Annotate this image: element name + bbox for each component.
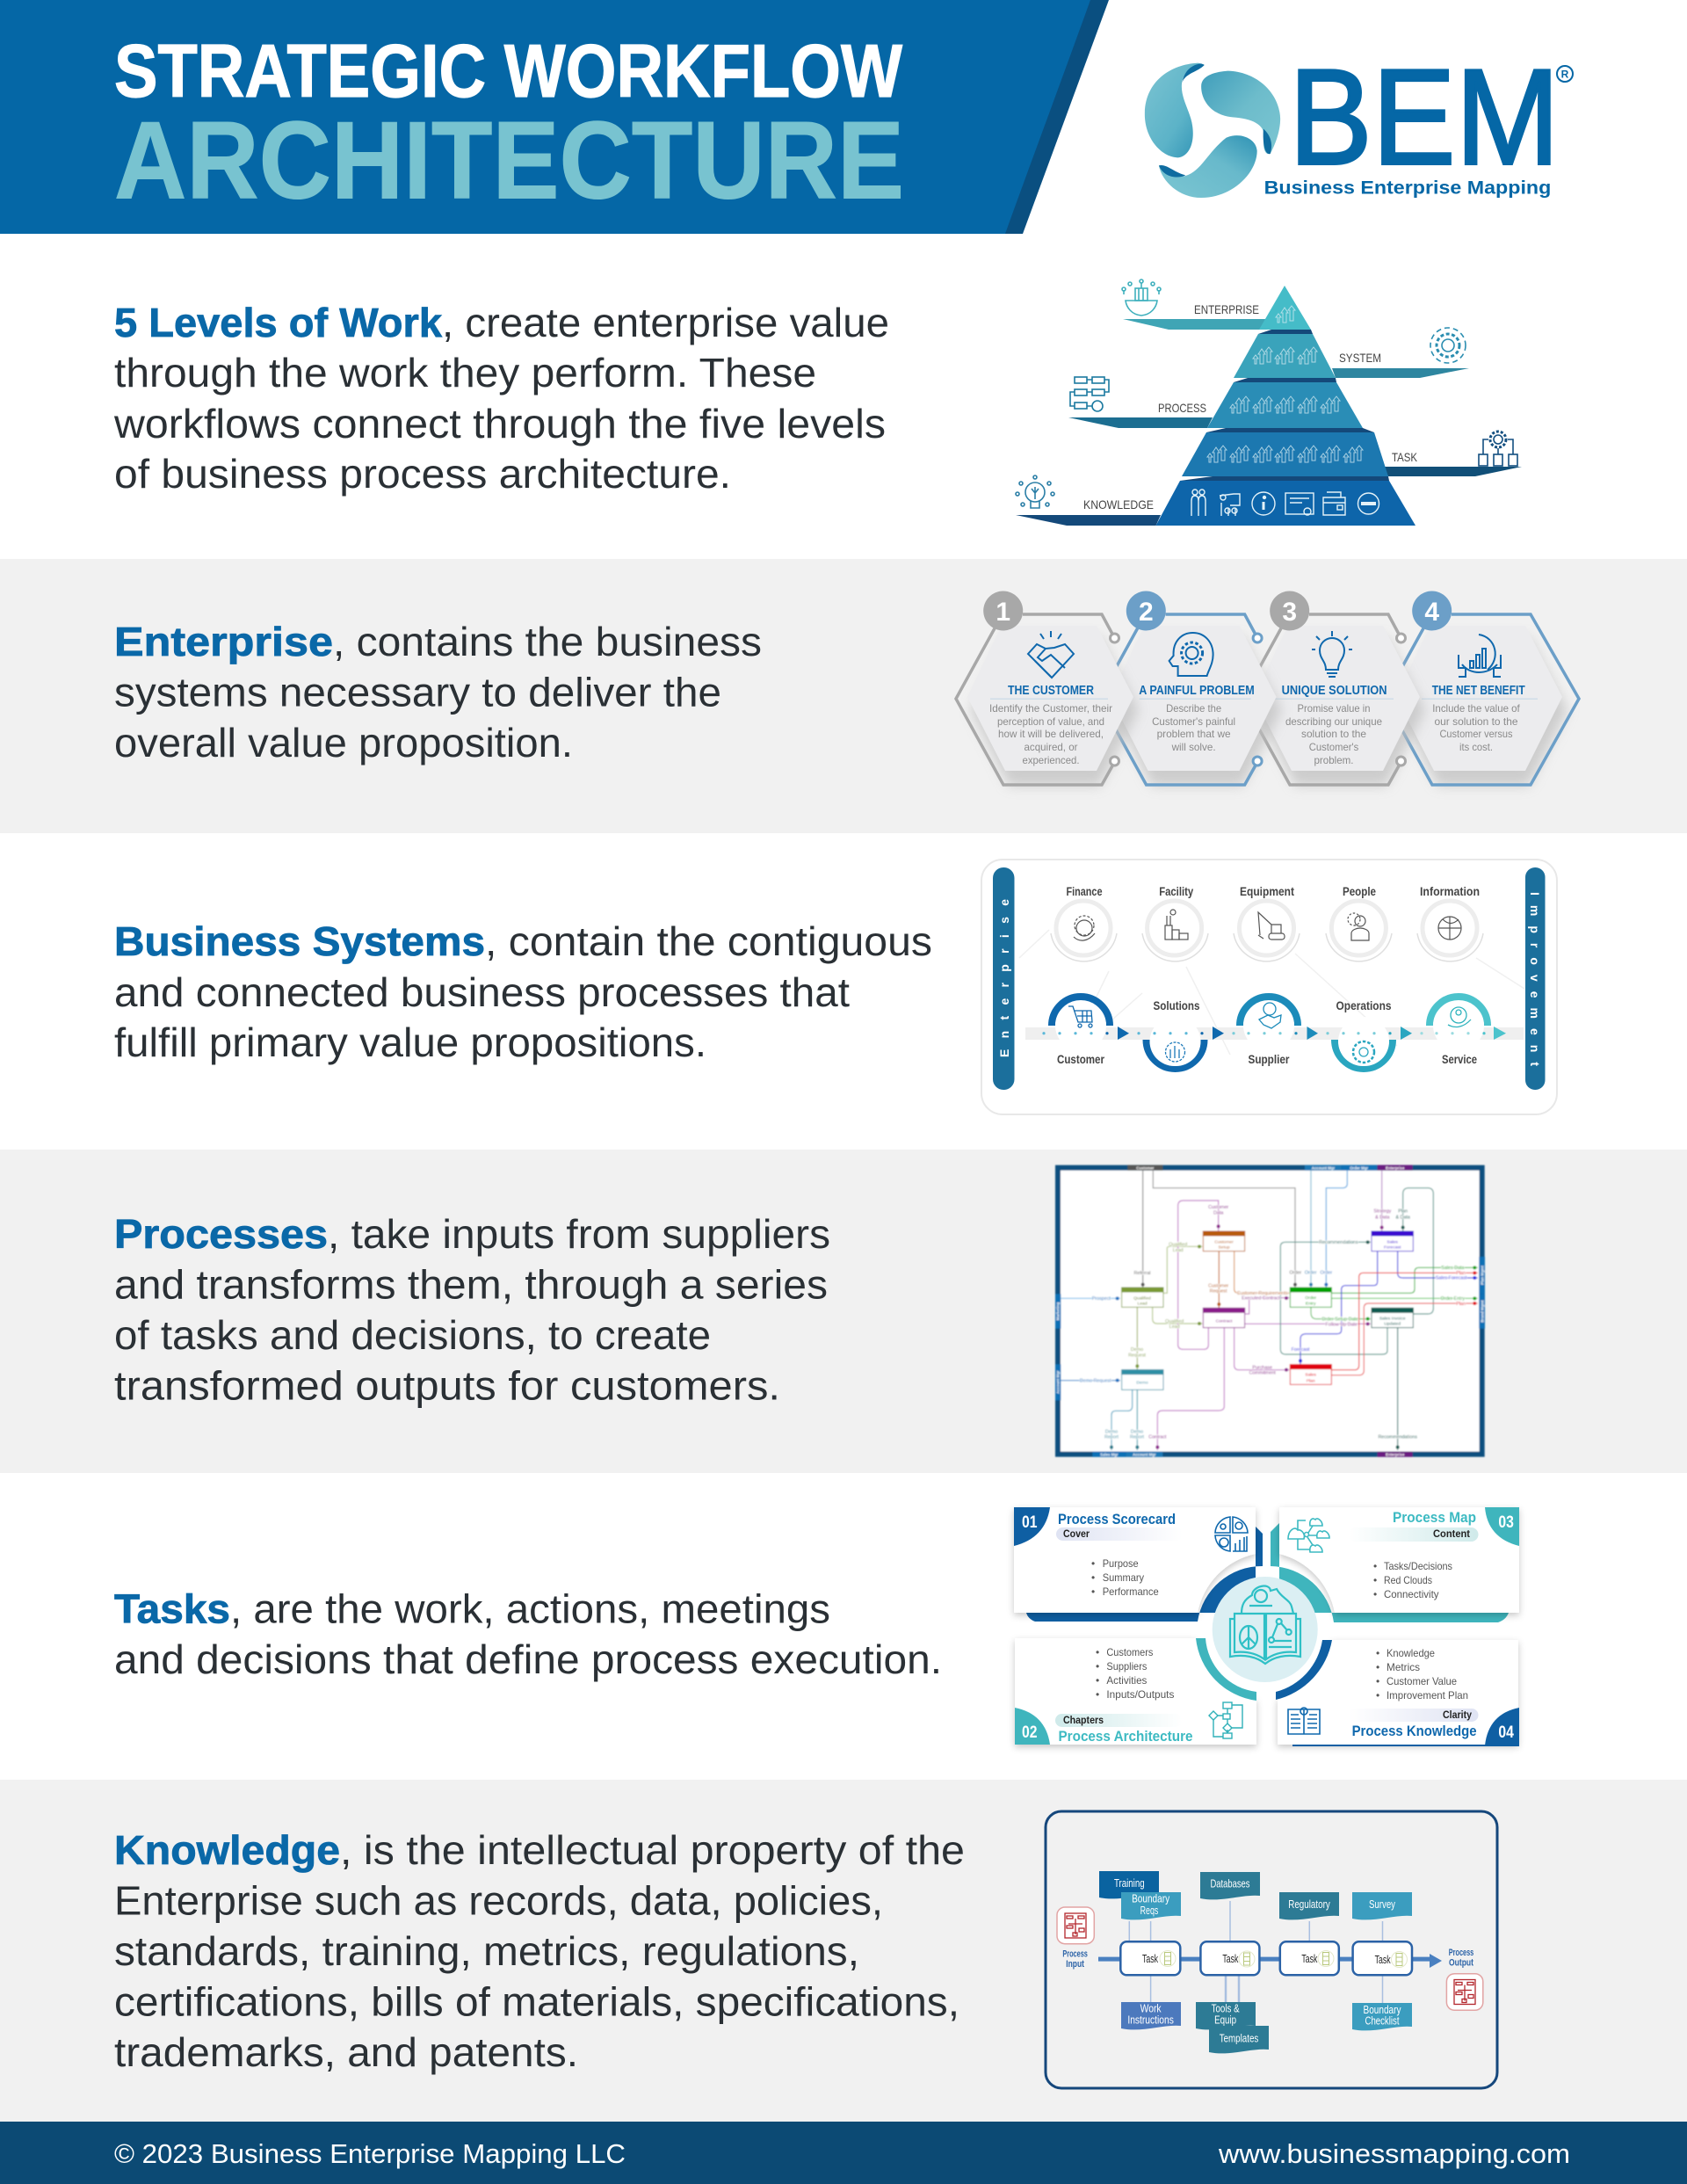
pyramid labels: TASK bbox=[1392, 450, 1418, 464]
grey band: processes bbox=[0, 1150, 1687, 1473]
text block: 5 levels of work: , create enterprise value bbox=[442, 300, 889, 345]
card 01: process scorecard: Process Scorecard bbox=[1058, 1511, 1176, 1527]
map frame bbox=[1058, 1168, 1482, 1455]
card 02: process architecture bbox=[1015, 1638, 1256, 1745]
text block: enterprise: systems necessary to deliver the bbox=[114, 670, 721, 715]
text block: 5 levels of work: of business process architecture. bbox=[114, 451, 731, 497]
enterprise side bar bbox=[993, 867, 1014, 1090]
title: ARCHITECTURE bbox=[114, 100, 904, 221]
card 04: process knowledge: Customer Value bbox=[1387, 1675, 1457, 1687]
document labels: Boundary bbox=[1132, 1891, 1169, 1905]
text block: processes: of tasks and decisions, to create bbox=[114, 1312, 711, 1358]
process box labels: Order bbox=[1305, 1295, 1316, 1301]
process box labels: Sales bbox=[1305, 1373, 1316, 1378]
copyright: © 2023 Business Enterprise Mapping LLC bbox=[114, 2138, 626, 2169]
flow arrowheads bbox=[1110, 1224, 1476, 1449]
text block: knowledge bbox=[114, 1827, 965, 2075]
step 2: a painful problem: A PAINFUL PROBLEM bbox=[1139, 684, 1255, 698]
step 4: the net benefit: its cost. bbox=[1459, 741, 1493, 753]
swimlane tabs bbox=[1055, 1165, 1485, 1457]
flow labels: Qualified bbox=[1165, 1319, 1184, 1324]
process box labels: Entry bbox=[1306, 1302, 1316, 1307]
logo swirl mark bbox=[1145, 63, 1280, 198]
process output bbox=[1446, 1948, 1483, 2010]
card 02: process architecture: 02 bbox=[1022, 1723, 1037, 1742]
step 2: a painful problem: Describe the bbox=[1166, 702, 1221, 715]
value chain labels: Service bbox=[1442, 1053, 1477, 1066]
text block: 5 levels of work: workflows connect through the five levels bbox=[113, 401, 886, 446]
process box labels: Customer bbox=[1214, 1239, 1234, 1244]
card 04: process knowledge: • bbox=[1376, 1675, 1379, 1687]
process input bbox=[1057, 1907, 1094, 1970]
footer bar bbox=[0, 2122, 1687, 2184]
document labels: Equip bbox=[1214, 2013, 1236, 2027]
document labels: Instructions bbox=[1127, 2013, 1174, 2027]
card 02: process architecture: • bbox=[1096, 1660, 1099, 1672]
chain dots bbox=[1042, 1032, 1486, 1034]
text block: knowledge: standards, training, metrics, regulations, bbox=[114, 1928, 859, 1974]
support labels: Finance bbox=[1067, 885, 1103, 898]
pyramid labels bbox=[1083, 302, 1418, 512]
process box labels: Setup bbox=[1218, 1244, 1230, 1250]
swimlane tabs: Enterprise bbox=[1386, 1165, 1405, 1170]
value chain labels: Solutions bbox=[1153, 999, 1200, 1012]
document labels: Regulatory bbox=[1288, 1897, 1330, 1911]
document labels: Boundary bbox=[1364, 2003, 1401, 2016]
process box labels: Updated bbox=[1384, 1322, 1401, 1327]
step 3: unique solution: 3 bbox=[1282, 598, 1297, 627]
card 01: process scorecard: Performance bbox=[1103, 1585, 1159, 1598]
task boxes: Task bbox=[1142, 1952, 1158, 1965]
step 1: the customer: perception of value, and bbox=[997, 715, 1104, 728]
process box labels bbox=[1133, 1239, 1406, 1386]
registered mark bbox=[1557, 66, 1573, 82]
flow labels: Commitment bbox=[1249, 1371, 1276, 1376]
task scorecard diagram bbox=[1014, 1507, 1519, 1746]
flow labels: Purchase bbox=[1252, 1366, 1272, 1371]
step 1: the customer: experienced. bbox=[1023, 754, 1079, 766]
ring segment: teal top right bbox=[1271, 1523, 1509, 1622]
flow labels: Report bbox=[1104, 1435, 1119, 1440]
document labels: Work bbox=[1140, 2002, 1162, 2014]
process box labels: Plan bbox=[1307, 1378, 1315, 1383]
central book hub bbox=[1213, 1577, 1318, 1682]
card 03: process map: Connectivity bbox=[1384, 1588, 1439, 1600]
flow labels: Plan bbox=[1456, 1302, 1466, 1307]
icon: knowledge bulb bbox=[1016, 475, 1054, 508]
icons: cart, solutions, handshake, gear, service bbox=[1068, 1003, 1471, 1063]
process box labels: Contract bbox=[1216, 1319, 1233, 1324]
text block: processes: Processes bbox=[114, 1211, 328, 1257]
flow labels: Recommendations bbox=[1378, 1434, 1417, 1440]
knowledge documents bbox=[1099, 1871, 1412, 2053]
step 4: the net benefit: Customer versus bbox=[1439, 728, 1513, 740]
flow labels: Plan bbox=[1456, 1271, 1466, 1276]
support labels: Facility bbox=[1159, 885, 1194, 898]
swimlane tabs: Sales Mgr bbox=[1100, 1452, 1119, 1456]
step 3: unique solution: problem. bbox=[1314, 754, 1353, 766]
document labels: Training bbox=[1114, 1876, 1145, 1890]
hexagon steps diagram bbox=[956, 591, 1579, 786]
flow labels: Data bbox=[1213, 1210, 1223, 1215]
step 1: the customer: how it will be delivered, bbox=[998, 728, 1104, 740]
flow labels: Demo bbox=[1105, 1430, 1118, 1435]
card 02: process architecture: Inputs/Outputs bbox=[1106, 1688, 1174, 1701]
card 04: process knowledge: Clarity bbox=[1443, 1709, 1472, 1721]
process box labels: Forecast bbox=[1384, 1244, 1401, 1250]
logo wordmark: BEM bbox=[1289, 40, 1560, 193]
step 3: unique solution: solution to the bbox=[1301, 728, 1366, 740]
card 04: process knowledge: Metrics bbox=[1387, 1661, 1420, 1673]
process output: Process bbox=[1449, 1948, 1473, 1958]
flow labels: Lead bbox=[1169, 1324, 1180, 1330]
card 04: process knowledge: • bbox=[1376, 1661, 1379, 1673]
flow labels: Contract bbox=[1148, 1434, 1167, 1440]
text block: knowledge: Enterprise such as records, data, policies, bbox=[114, 1877, 883, 1923]
flow lines bbox=[1061, 1171, 1478, 1450]
step 3: unique solution bbox=[1242, 591, 1425, 786]
text block: processes: transformed outputs for customers. bbox=[114, 1362, 780, 1408]
flow labels: Recommendations bbox=[1319, 1240, 1358, 1245]
text block: tasks: and decisions that define process execution. bbox=[114, 1636, 942, 1682]
card 02: process architecture: • bbox=[1096, 1688, 1099, 1701]
text block: tasks: , are the work, actions, meetings bbox=[230, 1585, 830, 1631]
card 02: process architecture: Customers bbox=[1106, 1646, 1153, 1658]
flow labels: Referral bbox=[1134, 1271, 1150, 1276]
text block: 5 levels of work: 5 Levels of Work bbox=[114, 300, 442, 345]
knowledge level icons bbox=[1191, 490, 1379, 516]
card 03: process map: • bbox=[1373, 1574, 1377, 1586]
value chain labels: Supplier bbox=[1248, 1053, 1290, 1066]
card 01: process scorecard: • bbox=[1091, 1571, 1095, 1584]
icon: system gear bbox=[1430, 328, 1466, 363]
document labels bbox=[1114, 1876, 1401, 2044]
card 03: process map: Process Map bbox=[1393, 1509, 1476, 1526]
step 3: unique solution: Promise value in bbox=[1297, 702, 1371, 715]
process output: Output bbox=[1449, 1958, 1473, 1969]
document labels: Templates bbox=[1220, 2032, 1259, 2044]
process box labels: Qualified bbox=[1133, 1295, 1151, 1301]
task boxes: Task bbox=[1375, 1953, 1391, 1966]
card 01: process scorecard bbox=[1014, 1507, 1256, 1613]
text block: 5 levels of work: through the work they perform. These bbox=[114, 350, 816, 395]
text block: business systems: , contain the contiguous bbox=[485, 918, 932, 964]
flow labels: Demo bbox=[1131, 1430, 1143, 1435]
card 02: process architecture: Activities bbox=[1106, 1674, 1147, 1687]
pyramid connector gaps bbox=[1180, 330, 1389, 481]
flow labels: Customer bbox=[1208, 1205, 1228, 1210]
logo: BEM Business Enterprise Mapping bbox=[1145, 40, 1573, 199]
step 1: the customer: Identify the Customer, their bbox=[989, 702, 1112, 715]
value chain labels: Operations bbox=[1336, 999, 1392, 1012]
step 2: a painful problem: 2 bbox=[1139, 598, 1154, 627]
improvement side bar: Improvement bbox=[1528, 892, 1542, 1066]
value chain band bbox=[1025, 997, 1524, 1069]
step 4: the net benefit bbox=[1385, 591, 1579, 786]
card 04: process knowledge: Process Knowledge bbox=[1352, 1723, 1477, 1739]
value chain labels: Customer bbox=[1057, 1053, 1105, 1066]
main flow arrow bbox=[1098, 1954, 1442, 1968]
support labels: Information bbox=[1420, 885, 1480, 898]
swimlane tabs: Enterprise bbox=[1386, 1452, 1405, 1456]
icon: process flowchart bbox=[1070, 377, 1109, 411]
logo tagline: Business Enterprise Mapping bbox=[1264, 178, 1551, 199]
header banner bbox=[0, 0, 1109, 234]
card 02: process architecture: Chapters bbox=[1063, 1714, 1104, 1726]
pyramid labels: ENTERPRISE bbox=[1194, 302, 1259, 316]
step 4: the net benefit: our solution to the bbox=[1434, 715, 1518, 728]
support circles row bbox=[1019, 885, 1524, 1055]
flow labels: Order bbox=[1290, 1270, 1301, 1275]
task boxes: Task bbox=[1222, 1952, 1239, 1965]
connector lines bbox=[1129, 1901, 1383, 2003]
text block: processes bbox=[114, 1211, 830, 1408]
value chain labels bbox=[1057, 999, 1477, 1066]
card 04: process knowledge: 04 bbox=[1498, 1723, 1514, 1742]
flow labels: Order Setup Date bbox=[1321, 1317, 1358, 1322]
card 02: process architecture: Suppliers bbox=[1106, 1660, 1147, 1672]
ring segment: blue top left bbox=[1026, 1527, 1263, 1622]
process box labels: Demo bbox=[1136, 1381, 1148, 1386]
text block: knowledge: trademarks, and patents. bbox=[114, 2029, 578, 2075]
card 03: process map: Red Clouds bbox=[1384, 1574, 1432, 1586]
swimlane tabs: Brand Mgmt bbox=[1480, 1300, 1484, 1323]
text block: business systems: fulfill primary value propositions. bbox=[114, 1019, 706, 1065]
step 4: the net benefit: 4 bbox=[1424, 598, 1439, 627]
card 03: process map: • bbox=[1373, 1588, 1377, 1600]
title bbox=[114, 30, 904, 221]
card 02: process architecture: Process Architecture bbox=[1058, 1728, 1193, 1745]
document labels: Tools & bbox=[1212, 2002, 1240, 2014]
process input: Input bbox=[1066, 1959, 1084, 1970]
step 2: a painful problem: will solve. bbox=[1171, 741, 1216, 753]
card 04: process knowledge: Knowledge bbox=[1387, 1647, 1435, 1659]
flow labels: Order bbox=[1321, 1270, 1332, 1275]
pyramid labels: SYSTEM bbox=[1339, 351, 1381, 365]
process input: Process bbox=[1062, 1949, 1088, 1960]
pyramid labels: PROCESS bbox=[1158, 401, 1206, 415]
flow labels: Order bbox=[1305, 1270, 1317, 1275]
pyramid diagram: five levels bbox=[1016, 279, 1522, 526]
text block: tasks: Tasks bbox=[114, 1585, 230, 1631]
task boxes: Task bbox=[1301, 1952, 1318, 1965]
chain direction arrows bbox=[1118, 1027, 1506, 1040]
support labels: People bbox=[1343, 885, 1376, 898]
flow labels: Sales Data bbox=[1441, 1266, 1464, 1271]
process box labels: Lead bbox=[1137, 1302, 1148, 1307]
step 3: unique solution: describing our unique bbox=[1285, 715, 1382, 728]
text block: enterprise: Enterprise bbox=[114, 619, 333, 664]
flow labels: Request bbox=[1128, 1353, 1146, 1359]
improvement side bar bbox=[1525, 867, 1545, 1090]
growth arrow icons bbox=[1207, 306, 1363, 462]
flow labels: Strategy bbox=[1373, 1209, 1392, 1215]
support labels: Equipment bbox=[1240, 885, 1294, 898]
grey band: enterprise bbox=[0, 559, 1687, 833]
swimlane tabs: Order Mgr bbox=[1350, 1165, 1368, 1170]
card 01: process scorecard: Purpose bbox=[1103, 1557, 1139, 1570]
process box labels: Sales Invoice bbox=[1379, 1317, 1406, 1322]
text block: enterprise bbox=[114, 619, 762, 765]
swimlane tabs: Plan Mgmt bbox=[1480, 1266, 1484, 1285]
flow labels: Forecast bbox=[1292, 1347, 1310, 1353]
card 04: process knowledge bbox=[1276, 1640, 1519, 1746]
document labels: Checklist bbox=[1365, 2014, 1400, 2027]
pyramid labels: KNOWLEDGE bbox=[1083, 497, 1154, 512]
flow labels: Follow Up Date bbox=[1325, 1322, 1358, 1327]
text block: business systems: Business Systems bbox=[114, 918, 485, 964]
step 1: the customer: 1 bbox=[996, 598, 1010, 627]
text block: knowledge: certifications, bills of materials, specifications, bbox=[114, 1979, 959, 2025]
step 3: unique solution: UNIQUE SOLUTION bbox=[1282, 684, 1387, 698]
card 03: process map: Tasks/Decisions bbox=[1384, 1560, 1452, 1572]
text block: tasks bbox=[114, 1585, 942, 1682]
flow labels bbox=[1080, 1205, 1467, 1440]
support labels bbox=[1067, 885, 1480, 898]
flow labels: Report bbox=[1130, 1435, 1145, 1440]
flow labels: & Data bbox=[1375, 1215, 1390, 1220]
text block: business systems bbox=[114, 918, 932, 1065]
flow labels: Request bbox=[1210, 1289, 1227, 1295]
text block: processes: and transforms them, through a series bbox=[114, 1262, 828, 1308]
flow labels: Customer Requirements bbox=[1237, 1291, 1288, 1296]
process boxes bbox=[1122, 1231, 1413, 1389]
card 03: process map: • bbox=[1373, 1560, 1377, 1572]
card 04: process knowledge: • bbox=[1376, 1647, 1379, 1659]
swimlane tabs: Account Mgr bbox=[1312, 1165, 1336, 1170]
flow labels: Order Entry bbox=[1441, 1296, 1465, 1302]
flow labels: Customer bbox=[1208, 1283, 1228, 1288]
website: www.businessmapping.com bbox=[1218, 2138, 1570, 2169]
document labels: Survey bbox=[1369, 1897, 1395, 1911]
flow labels: Executed Contract bbox=[1242, 1296, 1280, 1302]
card 02: process architecture: • bbox=[1096, 1646, 1099, 1658]
card 01: process scorecard: • bbox=[1091, 1585, 1095, 1598]
card 01: process scorecard: 01 bbox=[1022, 1513, 1038, 1532]
flow labels: Prospect bbox=[1092, 1296, 1111, 1302]
icons: finance, facility, equipment, people, information bbox=[1074, 910, 1461, 940]
text block: 5 levels of work bbox=[113, 300, 889, 497]
step 1: the customer bbox=[956, 591, 1139, 786]
step 3: unique solution: Customer's bbox=[1309, 741, 1358, 753]
swimlane tabs: Customer bbox=[1136, 1165, 1155, 1170]
swimlane tabs: Account Mgr bbox=[1133, 1452, 1156, 1456]
swimlane tabs: Marketing bbox=[1056, 1302, 1061, 1320]
text block: enterprise: , contains the business bbox=[333, 619, 762, 664]
step 1: the customer: acquired, or bbox=[1025, 741, 1077, 753]
knowledge task flow diagram bbox=[1046, 1811, 1497, 2088]
step 2: a painful problem bbox=[1099, 591, 1282, 786]
swimlane tabs: Account Mgr bbox=[1056, 1370, 1061, 1394]
step 2: a painful problem: problem that we bbox=[1157, 728, 1231, 740]
text block: enterprise: overall value proposition. bbox=[114, 720, 573, 765]
text block: processes: , take inputs from suppliers bbox=[328, 1211, 830, 1257]
step 4: the net benefit: THE NET BENEFIT bbox=[1432, 684, 1525, 698]
step 4: the net benefit: Include the value of bbox=[1432, 702, 1520, 715]
grey band: knowledge bbox=[0, 1780, 1687, 2122]
pyramid levels bbox=[1156, 286, 1415, 526]
process box labels: Sales bbox=[1387, 1239, 1398, 1244]
flow labels: Sales Forecast bbox=[1436, 1276, 1467, 1281]
card 03: process map: Content bbox=[1433, 1527, 1470, 1540]
icon: task gear and documents bbox=[1479, 432, 1517, 466]
card 04: process knowledge: Improvement Plan bbox=[1387, 1689, 1468, 1701]
text block: business systems: and connected business processes that bbox=[114, 969, 850, 1015]
shelves bbox=[1016, 319, 1522, 526]
panel: business systems bbox=[981, 860, 1557, 1114]
icon: enterprise building gear bbox=[1122, 279, 1161, 316]
flow labels: & Data bbox=[1396, 1215, 1410, 1220]
flow labels: Lead bbox=[1173, 1248, 1184, 1253]
card 01: process scorecard: Summary bbox=[1103, 1571, 1144, 1584]
card 01: process scorecard: • bbox=[1091, 1557, 1095, 1570]
card 01: process scorecard: Cover bbox=[1063, 1527, 1090, 1540]
card 04: process knowledge: • bbox=[1376, 1689, 1379, 1701]
text block: knowledge: Knowledge bbox=[114, 1827, 340, 1873]
text block: knowledge: , is the intellectual property of the bbox=[340, 1827, 965, 1873]
document labels: Databases bbox=[1211, 1877, 1250, 1890]
card 02: process architecture: • bbox=[1096, 1674, 1099, 1687]
card 03: process map bbox=[1279, 1507, 1519, 1613]
process map diagram bbox=[1055, 1165, 1485, 1457]
card 03: process map: 03 bbox=[1498, 1513, 1514, 1532]
step 2: a painful problem: Customer's painful bbox=[1152, 715, 1235, 728]
flow labels: Qualified bbox=[1169, 1243, 1187, 1248]
flow labels: Demo bbox=[1131, 1347, 1143, 1353]
task boxes bbox=[1120, 1941, 1412, 1975]
flow labels: Plan bbox=[1398, 1209, 1408, 1215]
flow frame bbox=[1046, 1811, 1497, 2088]
enterprise side bar: Enterprise bbox=[997, 899, 1011, 1057]
title: STRATEGIC WORKFLOW bbox=[114, 30, 903, 113]
step 1: the customer: THE CUSTOMER bbox=[1008, 684, 1094, 698]
flow labels: Demo Request bbox=[1080, 1378, 1111, 1383]
value chain rings bbox=[1052, 997, 1488, 1069]
document labels: Reqs bbox=[1140, 1904, 1159, 1917]
registered mark: R bbox=[1561, 69, 1569, 81]
